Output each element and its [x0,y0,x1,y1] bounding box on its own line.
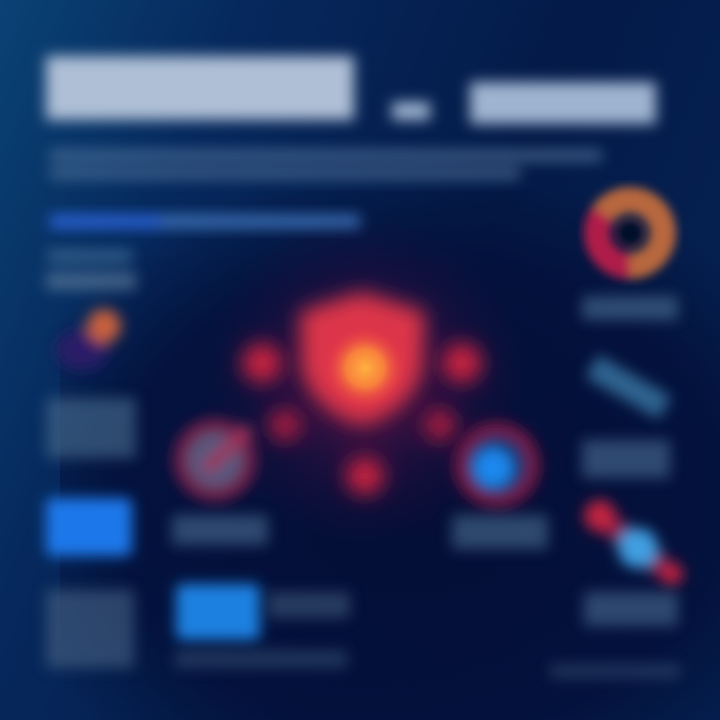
shield [300,292,425,425]
left column text block 1 [46,250,136,290]
blue panel bottom [176,584,260,640]
left circle icon [173,418,257,502]
line chart arrow [592,366,665,408]
blue highlighted heading bar [50,215,360,228]
network nodes [242,343,482,495]
left column text block 3 [46,590,134,668]
subtitle [50,150,602,179]
donut chart [597,200,663,266]
right network icon [584,500,683,585]
central glow [200,215,530,545]
label under right circle [452,515,548,549]
footer note [550,664,680,678]
icon: left orange dot [56,309,121,370]
text beside bottom panel [175,592,350,668]
right text block 2 [582,440,670,478]
right text block 3 [584,592,678,626]
blue panel left [46,498,132,556]
right text block 1 [582,296,678,320]
right circle icon [454,422,540,508]
left column text block 2 [46,398,136,458]
label under left circle [172,515,268,545]
title [46,56,656,124]
